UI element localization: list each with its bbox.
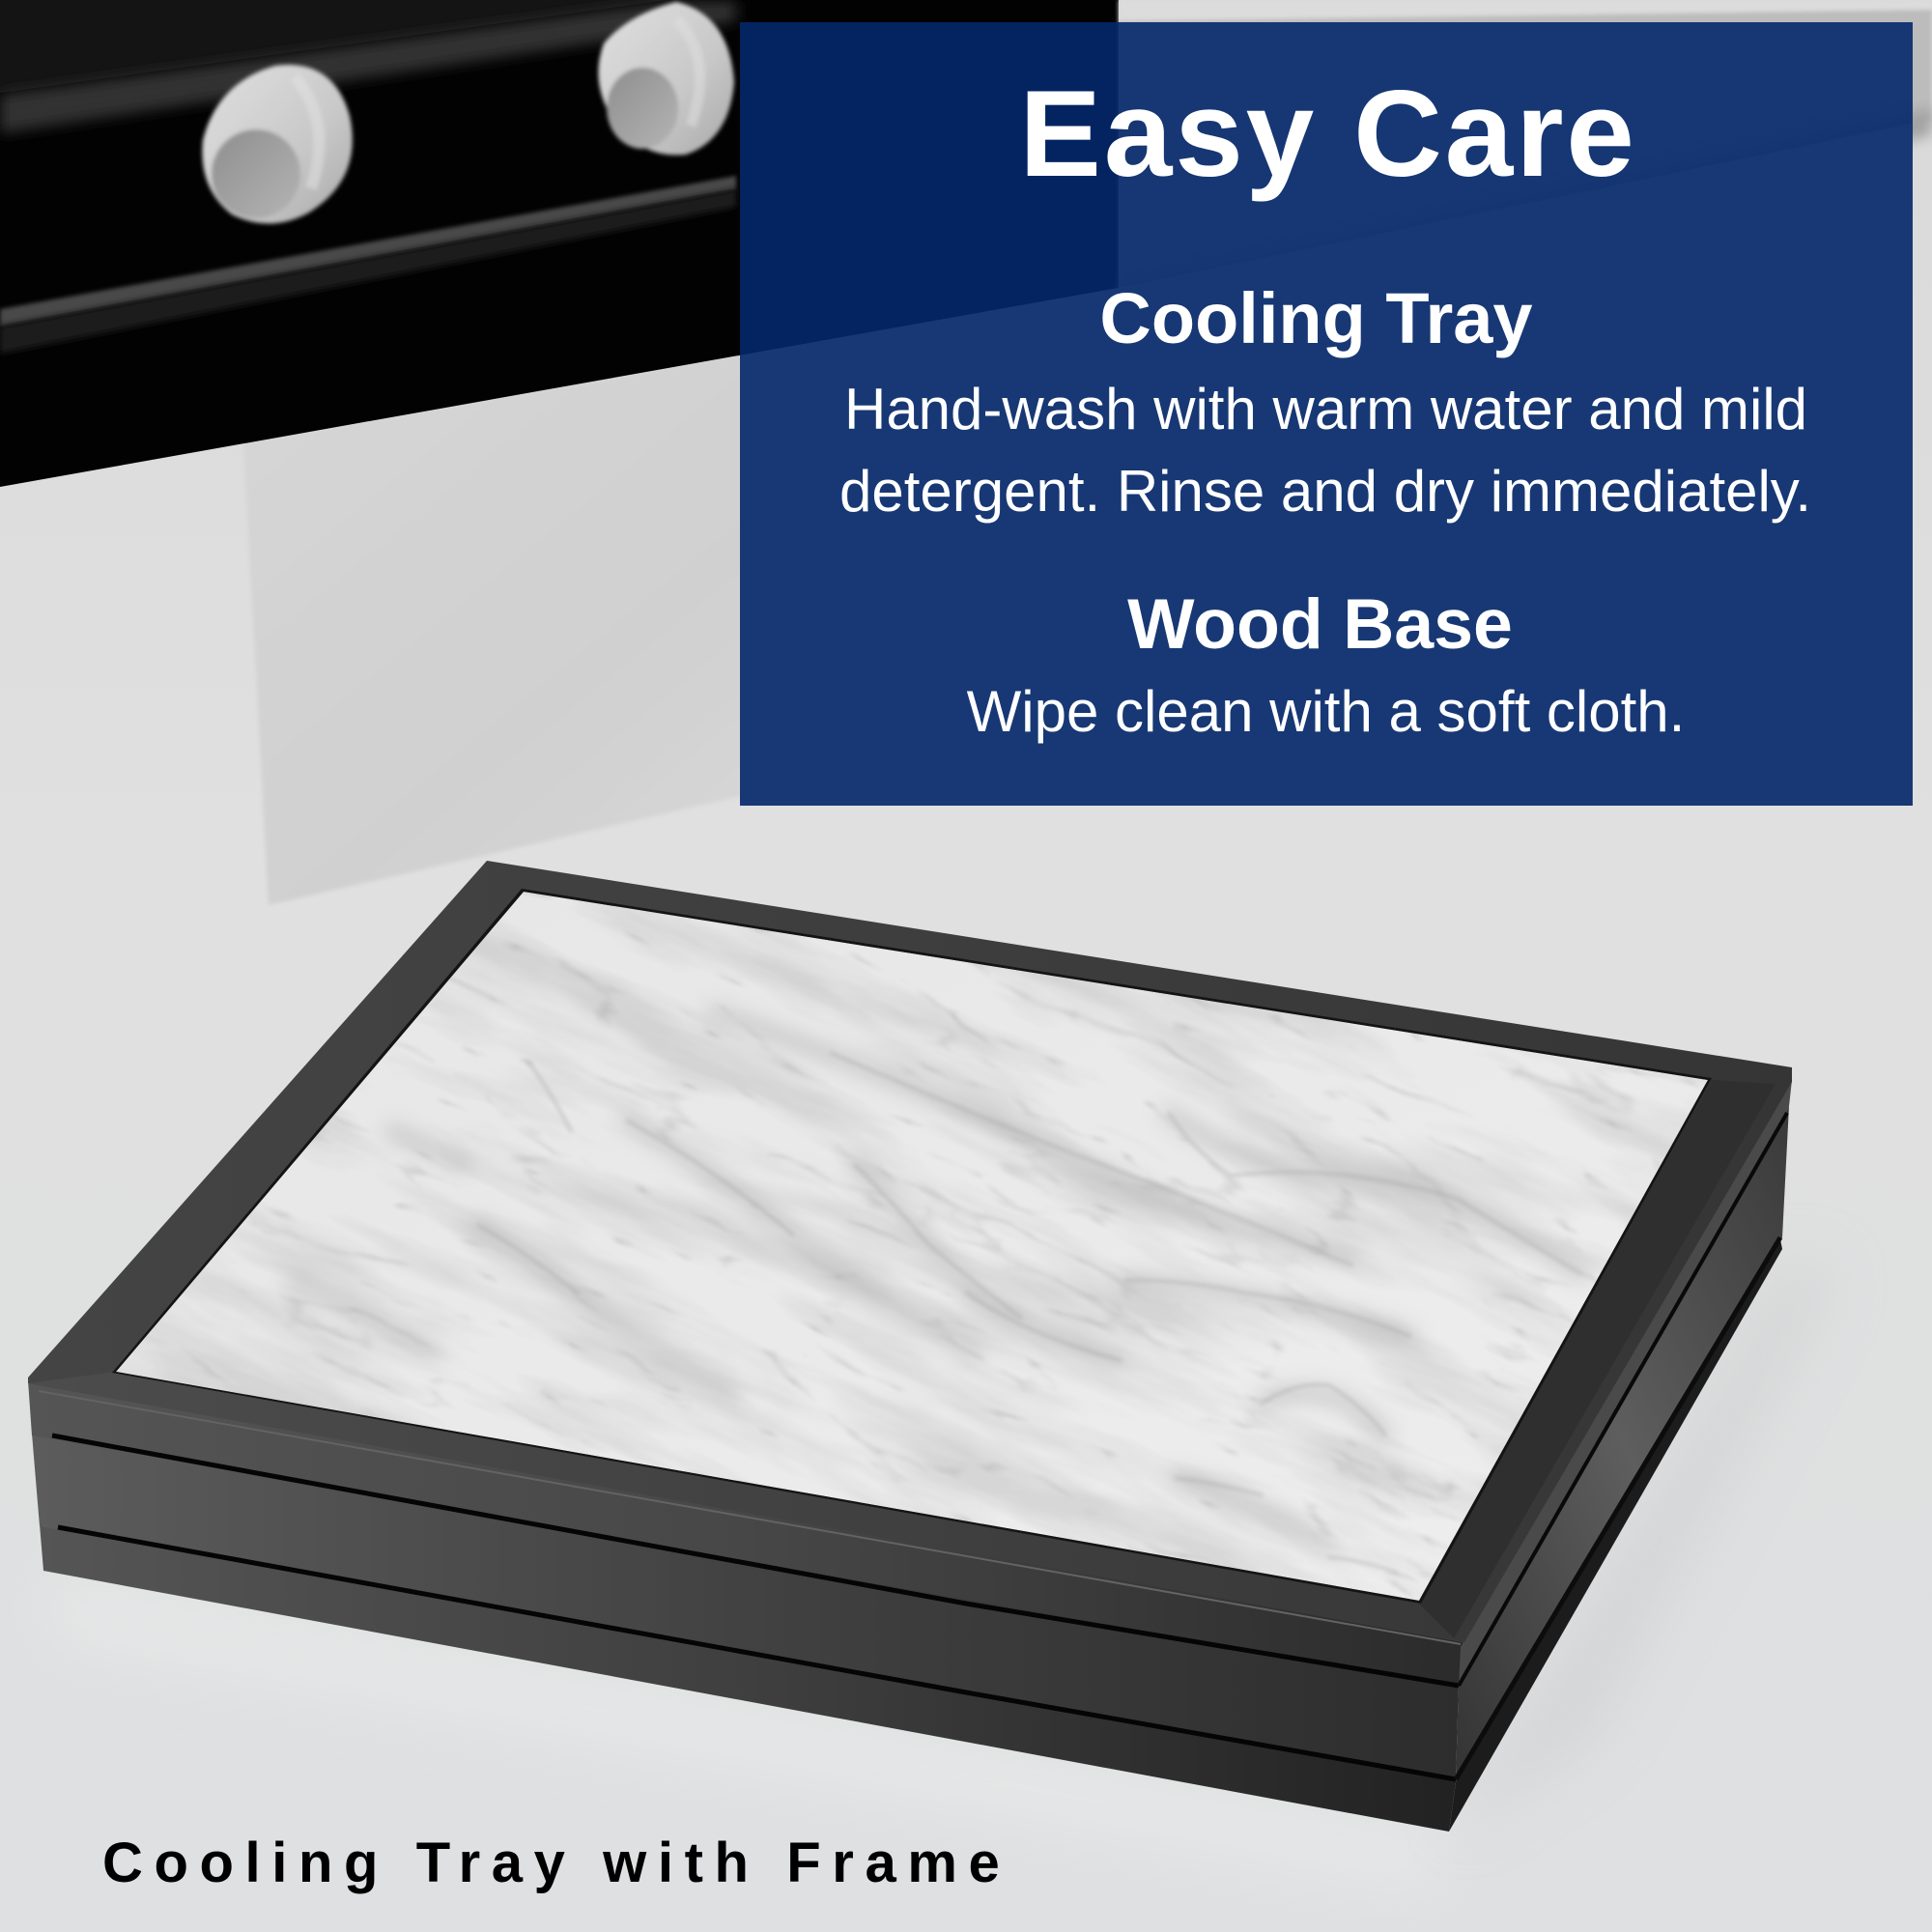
tray soft shadow and reflection [43,1256,1835,1893]
upper slot line [52,1435,1459,1686]
background: top right light wall [1119,0,1932,299]
marble top [116,892,1708,1601]
tray top layer front face [28,1380,1464,1686]
marble cloud texture [117,904,1708,1582]
frame front highlight edge [39,1391,1461,1644]
caption: cooling tray with frame: Cooling Tray with Frame [102,1832,1010,1894]
marble fine veins [478,1053,1582,1573]
frame top surface [28,861,1792,1642]
tray bottom layer side face [1449,1235,1782,1832]
side lower slot line [1456,1237,1780,1779]
heading: cooling tray: Cooling Tray [1099,278,1533,358]
text block: cooling tray care: Hand-wash with warm water and mild [844,377,1807,441]
tray bottom layer front face [40,1524,1457,1832]
tray top layer side face [1459,1080,1792,1686]
text block: cooling tray care: detergent. Rinse and dry immediately. [839,459,1811,524]
marble soft veins [290,1012,1582,1546]
tray middle layer front face [32,1434,1459,1779]
tray middle layer side face [1456,1106,1789,1779]
oven front: black band with rails and knobs [0,0,1119,487]
knob right [598,2,734,156]
cooling tray with frame [28,861,1792,1832]
oven upper rail [0,2,736,133]
title: easy care: Easy Care [1019,65,1637,202]
background: wall reflection panel [243,314,966,905]
lower slot line [58,1527,1456,1779]
marble inset shadow edge [112,889,1712,1604]
oven lower rail [0,176,736,327]
panel: easy care [740,22,1913,806]
marble turbulent vein texture [197,893,1694,1596]
text block: wood base care: Wipe clean with a soft cloth. [967,679,1685,744]
light area visible through panel [740,124,1912,806]
front frame rail [28,1372,1464,1642]
knob left [202,65,353,224]
right frame rail [1419,1080,1776,1638]
side upper slot line [1459,1113,1787,1686]
heading: wood base: Wood Base [1127,583,1513,664]
text block: cooling tray care [839,377,1811,524]
oven upper dark panel [0,0,667,93]
background: grey band at right edge [1119,108,1932,324]
